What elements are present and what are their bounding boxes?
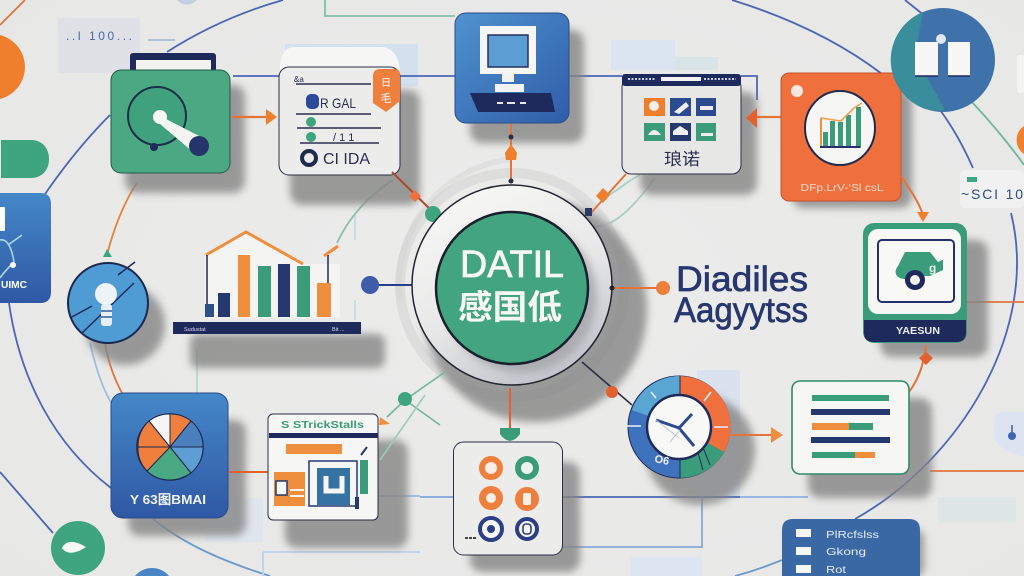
panel: monitor card	[455, 13, 569, 123]
connector: center to title	[610, 281, 670, 295]
chart: clock dial	[627, 376, 731, 478]
panel: legend card bottom right	[782, 519, 920, 576]
icon: gauge dial	[128, 87, 209, 156]
orange tag: 毛	[380, 92, 392, 105]
connector: center to icons card	[500, 388, 520, 441]
central title: DATIL	[460, 244, 564, 286]
panel: car card	[863, 223, 967, 343]
icon: bulb circle	[68, 249, 148, 343]
ticks	[627, 392, 728, 427]
panel: document card: CI IDA	[323, 151, 370, 168]
chart: bar chart with roof	[173, 232, 361, 334]
connector: list card to car card	[909, 345, 933, 392]
panel: pie card	[111, 393, 228, 518]
label: top left note: ..l 100...	[66, 29, 132, 43]
small heading: &a	[294, 75, 304, 84]
chart base	[173, 322, 361, 334]
central subtitle: 感国低	[458, 289, 562, 327]
panel: central button	[412, 185, 612, 385]
clock hands	[656, 414, 694, 446]
central gray swirl	[399, 159, 624, 397]
panel: green gauge card	[111, 53, 230, 173]
title: Aagyytss	[674, 291, 808, 330]
chart base: Bit ...	[332, 327, 345, 333]
orange tag	[373, 69, 400, 112]
partial circle: blue bottom	[135, 568, 169, 576]
card label: UIMC	[1, 280, 27, 291]
card handle	[130, 53, 216, 73]
chart base: Sudustat	[184, 327, 206, 333]
caption: DFp.LrV-‘Sl csL	[800, 182, 884, 194]
panel: document card: / 1 1	[333, 132, 354, 144]
icon: book circle	[891, 8, 995, 112]
title	[674, 260, 808, 330]
header bar	[622, 74, 741, 86]
partial circle: orange left	[0, 35, 25, 99]
connector: monitor to center	[505, 124, 517, 184]
panel: document card	[279, 47, 400, 175]
chart circle	[805, 91, 875, 165]
header: S STrickStalls	[281, 420, 365, 431]
connector: sticky to pie	[229, 471, 268, 473]
arrow: green card to document	[232, 109, 277, 125]
bars	[205, 255, 331, 317]
connector: grid to center	[585, 174, 626, 216]
panel: icon buttons card	[454, 442, 562, 555]
right note: label: ~SCI 10	[961, 186, 1023, 202]
badge	[791, 85, 803, 97]
green network lines	[379, 372, 445, 460]
panel: orange chart card	[781, 73, 901, 201]
green pill	[1, 140, 49, 178]
content blocks	[274, 444, 368, 509]
pie chart	[137, 414, 203, 480]
partial circle: top	[177, 0, 197, 5]
panel: blue left card	[0, 193, 51, 303]
panel: app grid card	[622, 74, 741, 174]
icon: monitor	[470, 26, 555, 112]
icon: car: g	[929, 261, 936, 275]
arrow: orange card to car card	[901, 176, 929, 222]
caption: Y 63图BMAI	[130, 492, 206, 507]
title: Diadiles	[676, 260, 808, 299]
arrow: clock to list	[731, 427, 783, 443]
partial circle: orange right	[1017, 126, 1024, 154]
right note: label	[960, 170, 1024, 208]
round icons	[479, 456, 539, 540]
label: YAESUN	[896, 326, 940, 337]
row text: R GAL	[320, 95, 356, 111]
panel: legend card bottom right: Gkong	[826, 546, 866, 558]
connector: doc to center	[392, 172, 441, 222]
panel: legend card bottom right: Rot	[826, 564, 846, 576]
panel: sticky report card	[268, 414, 378, 520]
orange tag: 日	[381, 78, 391, 89]
connector: center to clock	[582, 362, 632, 405]
right note: top	[1017, 55, 1024, 93]
icon: ring	[302, 151, 316, 165]
partial circle: right pin panel	[994, 412, 1024, 457]
dial label: O6	[653, 453, 670, 468]
panel: legend card bottom right: PlRcfslss	[826, 529, 879, 541]
arrow: orange card to grid	[746, 108, 781, 128]
caption: 琅诺	[664, 150, 700, 169]
icons grid	[644, 98, 716, 141]
icon: green drop circle	[51, 521, 105, 575]
connector: chart to center	[361, 276, 412, 294]
list bars	[811, 395, 890, 458]
panel: list card	[792, 381, 909, 474]
roof line	[206, 232, 303, 264]
